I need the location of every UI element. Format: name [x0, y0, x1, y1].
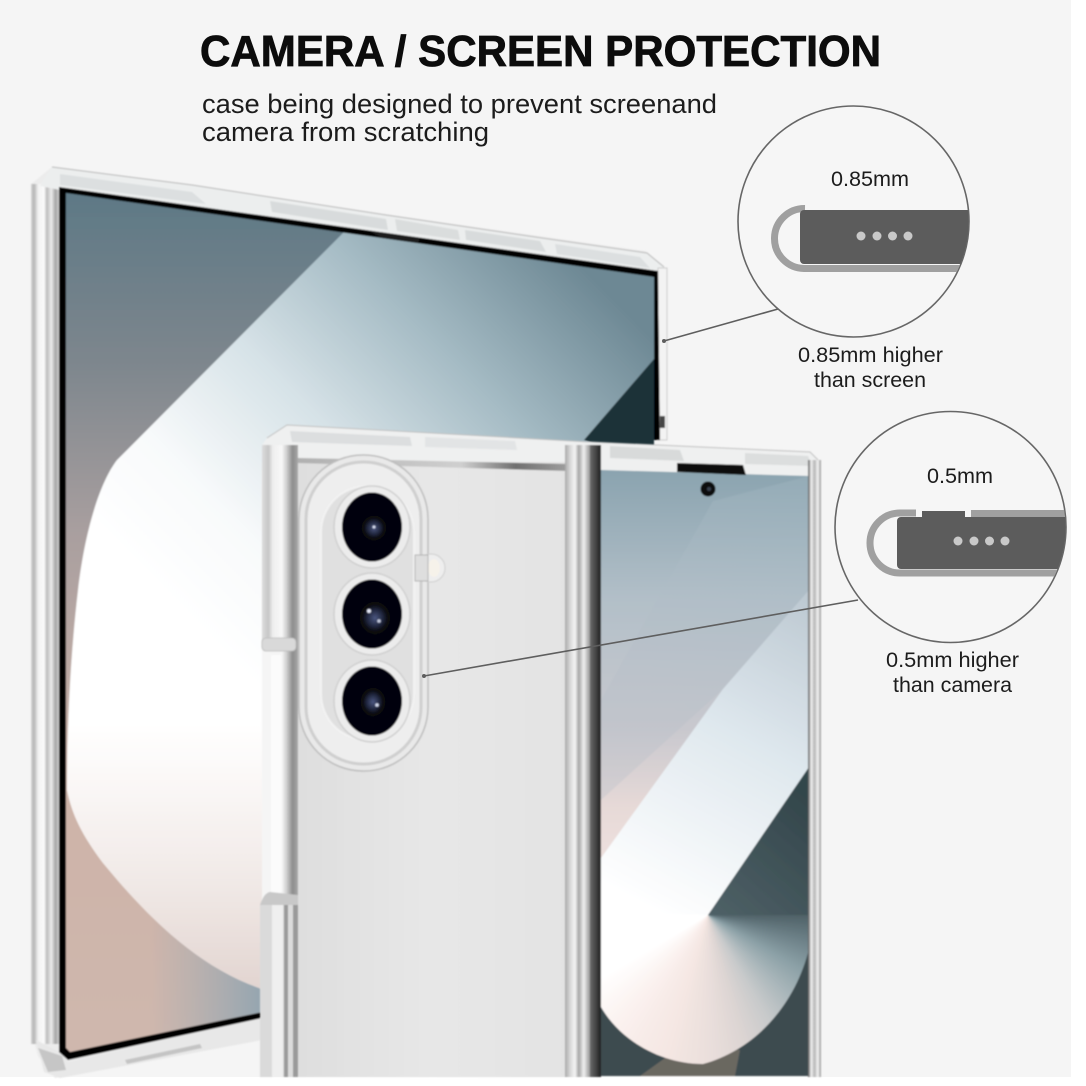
- callout: screen height detail circle: [738, 106, 980, 337]
- case top rail: [40, 167, 664, 274]
- caption: screen height: than screen: [814, 369, 926, 392]
- bottom lens: [334, 660, 410, 742]
- wallpaper lower-right blue tint: [158, 934, 260, 1036]
- arrow: screen pointer line: [662, 309, 778, 343]
- speaker dots: [954, 536, 1010, 546]
- caption: camera height: [886, 649, 1019, 697]
- measurement label: 0.85mm: [831, 168, 909, 191]
- subtitle text: camera from scratching: [202, 117, 489, 147]
- wallpaper dark corner: [584, 358, 656, 446]
- folded phone with clear case, back and front: [260, 425, 821, 1080]
- case top rail: folded phone: [262, 425, 820, 480]
- case bottom rail: [36, 1018, 262, 1078]
- subtitle text: case being designed to prevent screenand: [202, 89, 717, 119]
- large phone with clear case (unfolded screen): [31, 167, 667, 1078]
- hinge silver stripes: [565, 445, 590, 1077]
- main screen wallpaper: [60, 185, 660, 1065]
- island ring highlight: [306, 462, 421, 764]
- circle outline: [835, 412, 1066, 642]
- caption: camera height: than camera: [893, 674, 1012, 697]
- front screen: [601, 465, 809, 1080]
- case notch on top bezel: [370, 231, 420, 243]
- case left rail middle section: [262, 638, 298, 905]
- front wallpaper fan: [600, 914, 808, 1065]
- cross-section diagram: [774, 208, 980, 268]
- caption: camera height: 0.5mm higher: [886, 649, 1019, 672]
- caption: screen height: [798, 344, 943, 392]
- front screen top notch: [677, 463, 746, 475]
- island inner plate: [321, 486, 414, 740]
- subtitle text: [202, 89, 717, 147]
- device body: [897, 517, 1077, 569]
- wallpaper light wedge and blob: [66, 231, 656, 925]
- device body: [800, 210, 980, 264]
- side button shadow: [660, 416, 665, 428]
- caption: screen height: 0.85mm higher: [798, 344, 943, 367]
- island outer ring: [299, 455, 428, 771]
- circle outline: [738, 106, 969, 337]
- cross-section diagram: [870, 510, 1077, 573]
- top lens: [334, 486, 410, 568]
- front wallpaper dark triangle: [708, 768, 809, 916]
- case right rail: folded phone: [808, 460, 821, 1077]
- punch-hole camera: [700, 482, 716, 496]
- case left rail: [31, 184, 60, 1044]
- camera island: [299, 455, 445, 771]
- front wallpaper base: [600, 469, 809, 858]
- case left rail lower: [260, 892, 298, 1077]
- case body: large phone: [31, 167, 667, 1078]
- wallpaper base: [60, 185, 660, 1065]
- front wallpaper brown wedge: [640, 1050, 740, 1076]
- speaker dots: [856, 232, 912, 240]
- case left rail upper: [262, 445, 298, 640]
- back panel: [298, 462, 565, 1077]
- black screen bezel: [59, 187, 660, 1060]
- front wallpaper light band: [601, 590, 809, 915]
- back panel top groove: [298, 458, 570, 471]
- title: CAMERA / SCREEN PROTECTION: [200, 27, 881, 76]
- case hook: [774, 208, 975, 268]
- case hook and top lip: [870, 513, 1075, 573]
- right top lip: [971, 510, 1065, 517]
- front wallpaper dark lower area: [600, 953, 809, 1078]
- case right rail: [658, 268, 667, 440]
- front wallpaper subtle wedge: [601, 476, 809, 800]
- measurement label: 0.5mm: [927, 465, 993, 488]
- middle lens: [334, 573, 410, 655]
- callout: camera height detail circle: [835, 412, 1077, 642]
- flash cut-out: [415, 554, 445, 582]
- arrow: camera pointer line: [422, 600, 858, 678]
- camera bump: [922, 511, 965, 517]
- blob pink lower shading: [68, 780, 262, 988]
- hinge dark strip: [590, 445, 601, 1077]
